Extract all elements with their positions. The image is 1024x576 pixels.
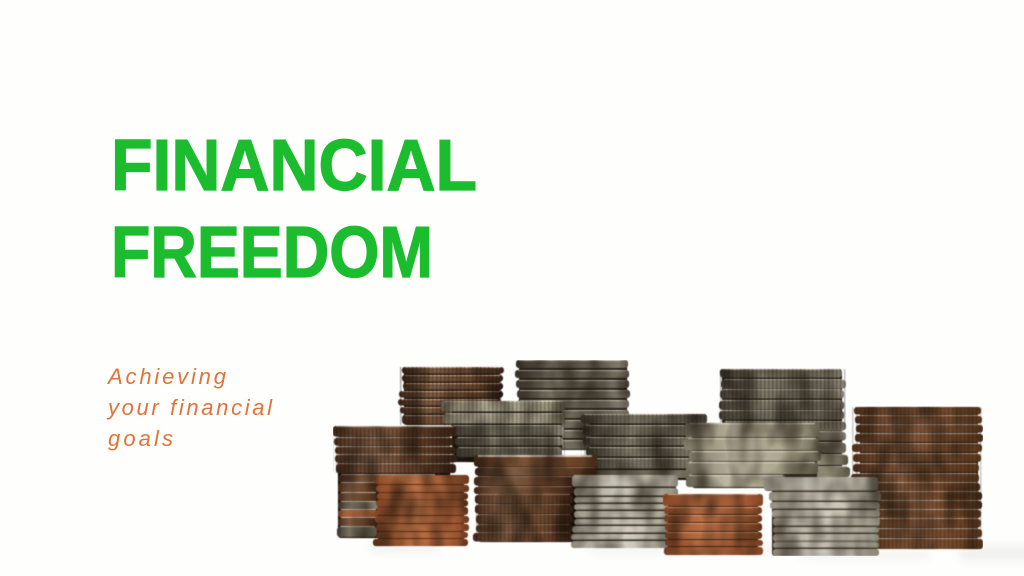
coin stack: front copper right (663, 494, 763, 555)
coin stack: front silver (571, 475, 678, 548)
photo: stacks of coins (333, 360, 983, 556)
subtitle: your financial (106, 395, 273, 420)
title (111, 126, 477, 293)
coin stack: middle silver over copper (441, 401, 565, 462)
coin stack: back left copper (398, 367, 504, 425)
coin stack: front dark copper (473, 455, 597, 542)
coin stack: back centre dark silver (515, 360, 630, 450)
coin stack: right brown (851, 407, 983, 549)
coin stack: back right silver (719, 369, 850, 478)
subtitle: Achieving (106, 364, 227, 389)
subtitle: goals (108, 426, 173, 451)
title: FINANCIAL (111, 126, 477, 206)
coin stack: front bright copper (373, 475, 469, 546)
coin stack: left copper (333, 426, 457, 538)
ground shadow (370, 545, 1024, 560)
coin stack: middle dark silver (581, 414, 707, 480)
subtitle (106, 364, 273, 451)
coin stack: front white silver (764, 477, 881, 556)
title: FREEDOM (111, 213, 433, 293)
coin stack: front light silver (684, 423, 821, 488)
